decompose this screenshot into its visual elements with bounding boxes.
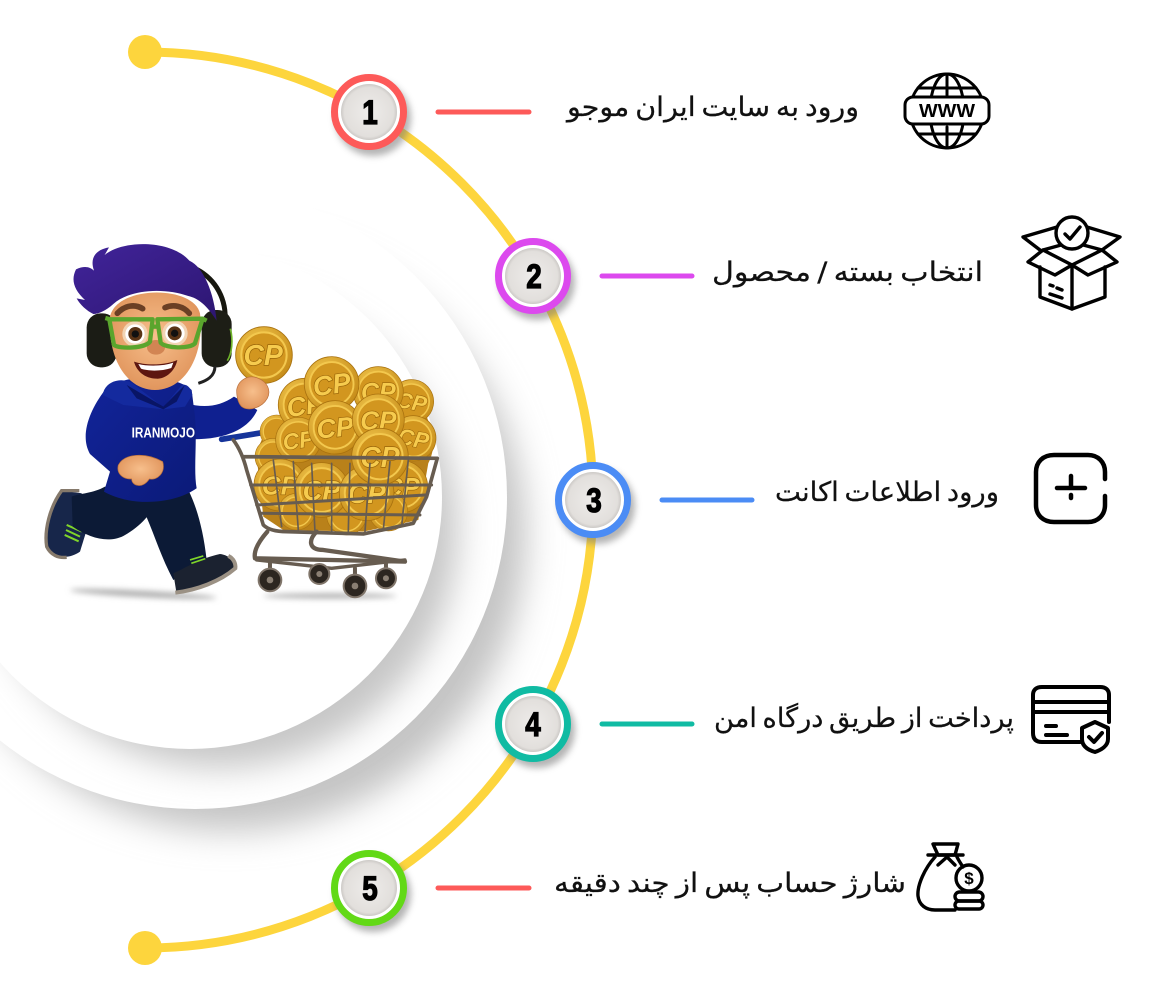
node 2 xyxy=(498,242,575,320)
face xyxy=(110,292,201,390)
left shoe xyxy=(46,491,87,557)
right shoe xyxy=(173,554,235,594)
character and cart illustration xyxy=(46,244,440,601)
coin pile: CP xyxy=(361,379,396,407)
connector 1 xyxy=(438,110,529,114)
hood xyxy=(103,380,192,409)
fist xyxy=(118,455,163,486)
coin pile: CP xyxy=(384,472,420,502)
step 5 xyxy=(334,844,983,932)
hoodie label: IRANMOJO xyxy=(132,424,195,441)
connector 3 xyxy=(662,498,752,502)
node 1 xyxy=(334,78,411,156)
icon: www globe xyxy=(905,74,989,148)
glasses xyxy=(105,318,207,348)
icon: plus frame xyxy=(1036,455,1105,522)
step 3 xyxy=(558,455,1105,544)
eyes xyxy=(122,321,188,347)
hair xyxy=(74,244,217,321)
connector 2 xyxy=(602,274,692,278)
eyebrows xyxy=(117,306,189,313)
right ear cup xyxy=(198,310,232,383)
hoodie body xyxy=(86,377,197,502)
coin pile: CP xyxy=(303,475,341,506)
step 1 xyxy=(334,74,989,156)
node 3: 3 xyxy=(586,481,602,520)
coin pile xyxy=(254,353,440,535)
ground shadow xyxy=(70,587,397,601)
step 4 xyxy=(498,687,1109,768)
connector 4 xyxy=(602,722,692,726)
label 4: پرداخت از طریق درگاه امن xyxy=(714,702,1014,734)
coin pile: CP xyxy=(360,442,400,474)
left ear cup xyxy=(87,313,117,367)
mouth xyxy=(134,360,177,379)
node 2: 2 xyxy=(526,257,542,296)
icon: money bag: $ xyxy=(964,869,974,888)
headphone band xyxy=(197,269,225,322)
held coin: CP xyxy=(243,340,283,372)
hoodie neck xyxy=(127,385,185,409)
nose xyxy=(147,340,165,355)
coin pile: CP xyxy=(394,387,429,417)
icon: open box with check xyxy=(1023,217,1120,309)
node 4: 4 xyxy=(525,705,541,744)
coin pile: CP xyxy=(360,405,397,435)
cart handle xyxy=(222,432,268,439)
icon: www globe: WWW xyxy=(919,101,975,121)
icon: money bag xyxy=(918,844,983,910)
coin pile: CP xyxy=(396,423,432,454)
coin pile: CP xyxy=(311,366,353,402)
held coin xyxy=(236,327,292,383)
right arm hoodie xyxy=(187,397,257,439)
node 3 xyxy=(558,466,635,544)
timeline arc xyxy=(128,35,593,965)
connector 5 xyxy=(438,886,529,890)
label 5: شارژ حساب پس از چند دقیقه xyxy=(554,868,906,899)
coin pile: CP xyxy=(315,411,355,445)
hand xyxy=(237,377,269,409)
node 1: 1 xyxy=(362,93,378,132)
trousers xyxy=(72,487,207,580)
coin pile: CP xyxy=(285,388,326,423)
cart xyxy=(233,440,437,578)
background: layered discs xyxy=(0,185,526,831)
label 1: ورود به سایت ایران موجو xyxy=(565,92,859,123)
step 2 xyxy=(498,217,1120,320)
node 5: 5 xyxy=(362,869,378,908)
coin pile: CP xyxy=(281,425,317,455)
coin pile: CP xyxy=(262,470,299,500)
cart wheels xyxy=(259,564,396,597)
icon: credit card with shield xyxy=(1033,687,1109,752)
label 3: ورود اطلاعات اکانت xyxy=(775,477,999,508)
coin pile: CP xyxy=(348,478,386,509)
node 4 xyxy=(498,690,575,768)
node 5 xyxy=(334,854,411,932)
label 2: انتخاب بسته / محصول xyxy=(712,257,983,288)
